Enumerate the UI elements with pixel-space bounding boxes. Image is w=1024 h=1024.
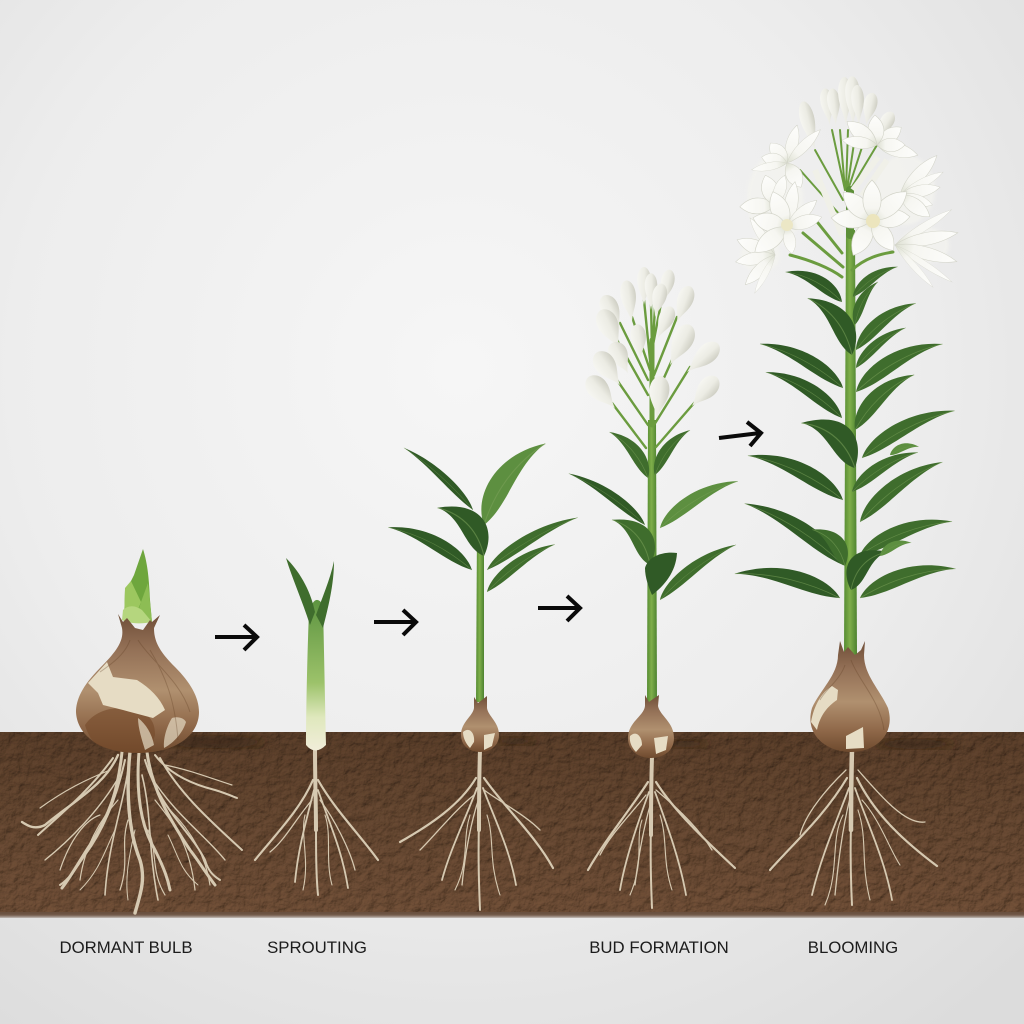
buds <box>580 267 725 419</box>
bulb <box>810 641 890 752</box>
shoot leaves <box>286 558 334 628</box>
label: sprouting: SPROUTING <box>267 938 367 957</box>
stem <box>844 230 857 655</box>
leaves <box>568 423 739 601</box>
arrow 4 <box>719 422 761 446</box>
top buds <box>796 76 898 152</box>
shoot stem <box>306 600 326 750</box>
leaves <box>388 430 578 593</box>
flower: front right <box>831 180 913 260</box>
roots: dormant bulb <box>22 752 242 913</box>
flower: right upper <box>895 151 945 222</box>
label: blooming: BLOOMING <box>808 938 898 957</box>
arrow 3 <box>538 596 580 621</box>
stage 4: bud formation <box>568 267 739 908</box>
leaves <box>734 259 956 600</box>
flower: right lower <box>893 206 959 289</box>
label: dormant bulb: DORMANT BULB <box>59 938 193 957</box>
stem <box>647 420 657 702</box>
flower: top right <box>841 115 919 162</box>
roots: young plant <box>400 750 553 910</box>
sprout <box>122 549 152 623</box>
arrow 2 <box>374 610 416 635</box>
stage 1: dormant bulb <box>22 549 242 913</box>
bulb body <box>76 614 199 753</box>
stage 5: blooming <box>734 76 959 905</box>
flower mass glow <box>740 155 949 273</box>
soil band <box>0 732 1024 917</box>
flower: left upper <box>751 124 824 191</box>
arrow 1 <box>215 625 257 650</box>
bud pedicels <box>612 293 695 448</box>
label: bud formation: BUD FORMATION <box>589 938 729 957</box>
bulb <box>461 696 499 752</box>
flower pedicels <box>790 130 893 277</box>
roots: blooming <box>770 750 937 905</box>
flower: left middle <box>739 173 790 215</box>
flower cluster <box>735 115 959 295</box>
roots: bud formation <box>588 757 735 908</box>
bulb <box>628 695 674 758</box>
flower: left lower <box>735 215 779 295</box>
stage 3: young plant <box>388 430 578 910</box>
stage 2: sprouting <box>255 558 378 895</box>
stem <box>476 525 484 702</box>
flower: front left <box>749 181 823 259</box>
roots: sprouting <box>255 750 378 895</box>
flower tubes <box>815 157 887 235</box>
